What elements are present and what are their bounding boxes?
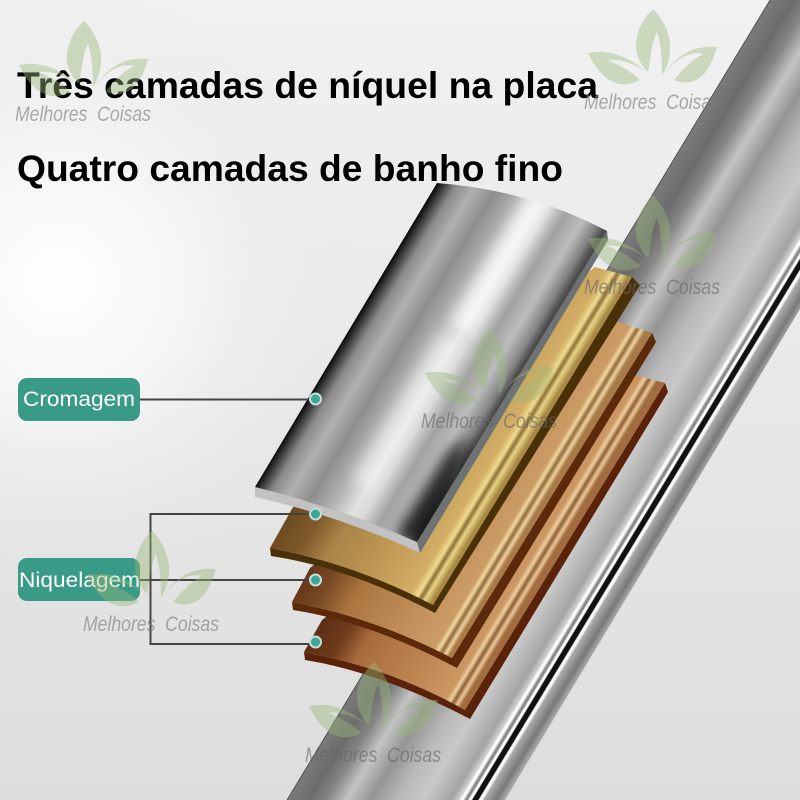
- watermark: lower left: [83, 531, 219, 636]
- leader lines: [140, 400, 310, 644]
- title: Três camadas de níquel na placa: [17, 65, 598, 106]
- label: Cromagem: Cromagem: [23, 388, 135, 411]
- watermark: top left: [15, 21, 151, 126]
- chrome layer: [255, 183, 612, 553]
- watermark: centre: [421, 329, 557, 433]
- copper layer 2: [292, 322, 656, 668]
- title: Quatro camadas de banho fino: [17, 148, 563, 189]
- title: [17, 65, 598, 189]
- watermark: lower left: Melhores Coisas: [83, 613, 219, 636]
- label: Cromagem: [18, 378, 140, 421]
- marker dots: [310, 394, 321, 648]
- watermark: right middle: [584, 195, 720, 299]
- label: Niquelagem: Niquelagem: [19, 569, 140, 592]
- watermark: top right: [584, 9, 720, 114]
- watermark: top right: Melhores Coisas: [584, 91, 720, 114]
- watermark: bottom: [305, 662, 441, 767]
- watermark: top left: Melhores Coisas: [15, 103, 151, 126]
- gold layer: [270, 267, 640, 613]
- chrome pipe: [287, 0, 800, 800]
- watermark: centre: Melhores Coisas: [421, 410, 557, 433]
- copper layer 3: [304, 375, 668, 719]
- watermark: right middle: Melhores Coisas: [584, 276, 720, 299]
- watermark: bottom: Melhores Coisas: [305, 744, 441, 767]
- label: Niquelagem: [18, 558, 140, 601]
